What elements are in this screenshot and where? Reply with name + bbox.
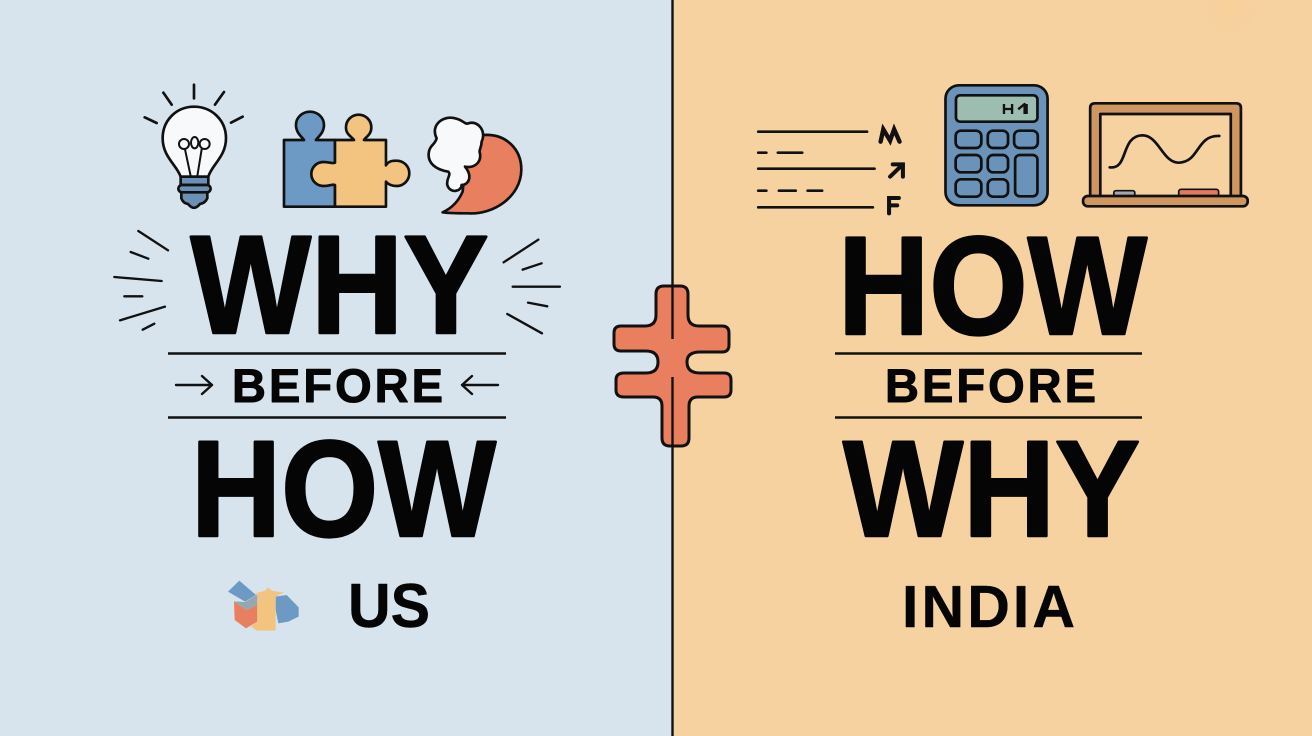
icon: calculator [946,85,1048,205]
text: BEFORE left: BEFORE [232,359,443,412]
heading: WHY left: WHY [190,206,488,363]
divider: lower [671,377,674,736]
text: BEFORE right: BEFORE [885,359,1096,412]
heading: HOW left: HOW [191,413,497,566]
heading: WHY right: WHY [843,413,1140,566]
heading: HOW right: HOW [838,207,1147,364]
rule: upper right [835,352,1142,355]
icon: speech bubble with cloud [429,118,521,213]
arrow: right-pointing [176,376,212,394]
rule: lower right [835,416,1142,419]
icon: formula lines [758,129,903,213]
rule: upper left [168,352,506,355]
divider: upper [671,0,674,339]
label: INDIA: INDIA [902,574,1075,640]
label: US: US [348,572,430,641]
burst lines: around WHY [114,231,560,333]
icon: plus connector [614,286,731,446]
panel: US background [0,0,672,736]
icon: chalkboard [1083,103,1248,206]
rule: lower left [168,416,506,419]
icon: puzzle pieces [284,112,409,207]
icon: colored blocks [228,581,299,631]
arrow: left-pointing [462,376,498,394]
icon: light bulb [145,85,243,208]
panel: India background [672,0,1312,736]
